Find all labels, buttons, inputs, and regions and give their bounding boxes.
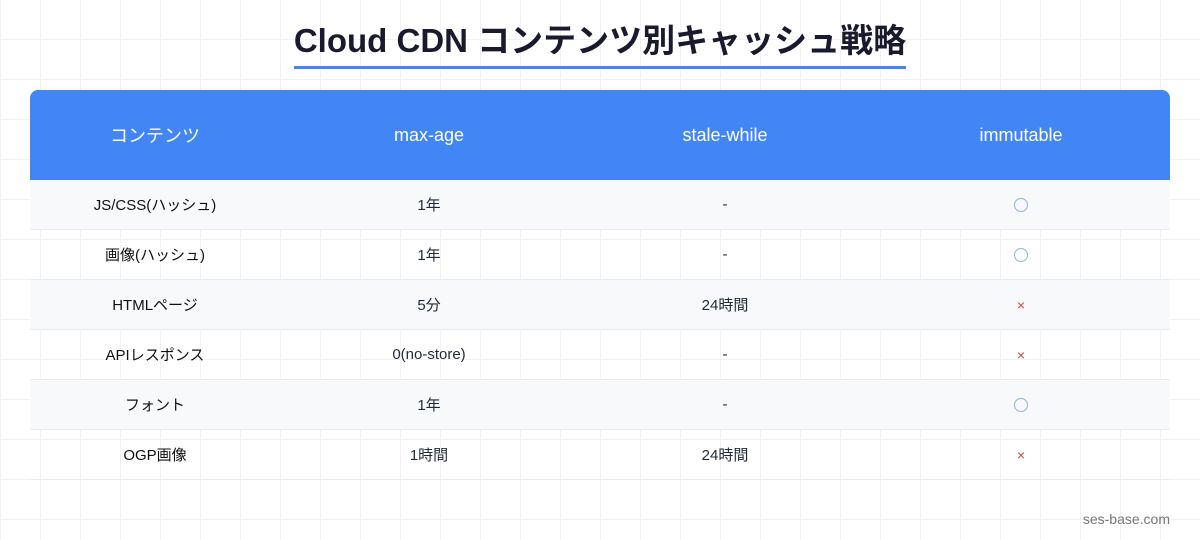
row: API: APIレスポンス — [106, 347, 204, 364]
footer credit: ses-base.com — [1083, 511, 1170, 527]
row: HTML: HTMLページ — [112, 297, 198, 314]
row: OGP: 1時間 — [410, 447, 448, 464]
row: OGP: 24時間 — [702, 447, 748, 464]
row: HTML: 5分 — [417, 297, 441, 314]
table: cache strategy — [30, 90, 1170, 480]
row: images — [30, 230, 1170, 280]
row: HTML: × — [1017, 296, 1025, 312]
row: images: - — [722, 246, 728, 263]
row: images: 1年 — [417, 247, 441, 264]
row: API — [30, 330, 1170, 380]
row: fonts — [30, 380, 1170, 430]
table header: stale-while — [682, 124, 768, 144]
row: API: × — [1017, 346, 1025, 362]
table header: immutable — [979, 124, 1063, 144]
row: fonts: - — [722, 396, 728, 413]
row: JS/CSS: 1年 — [417, 197, 441, 214]
row: OGP: × — [1017, 446, 1025, 462]
row: OGP — [30, 430, 1170, 480]
row: API: 0(no-store) — [392, 346, 466, 363]
row: JS/CSS: JS/CSS(ハッシュ) — [94, 197, 216, 214]
title: Cloud CDN コンテンツ別キャッシュ戦略 — [294, 22, 906, 59]
row: images: 画像(ハッシュ) — [105, 247, 205, 264]
table header — [30, 90, 1170, 180]
row: JS/CSS: - — [722, 196, 728, 213]
row: fonts: 1年 — [417, 397, 441, 414]
row: OGP: OGP画像 — [123, 447, 187, 464]
row: HTML: 24時間 — [702, 297, 748, 314]
row: JS/CSS — [30, 180, 1170, 230]
row: API: - — [722, 346, 728, 363]
table header: max-age — [394, 124, 464, 144]
row: fonts: フォント — [125, 397, 185, 414]
row: HTML — [30, 280, 1170, 330]
table header: コンテンツ — [110, 126, 200, 146]
